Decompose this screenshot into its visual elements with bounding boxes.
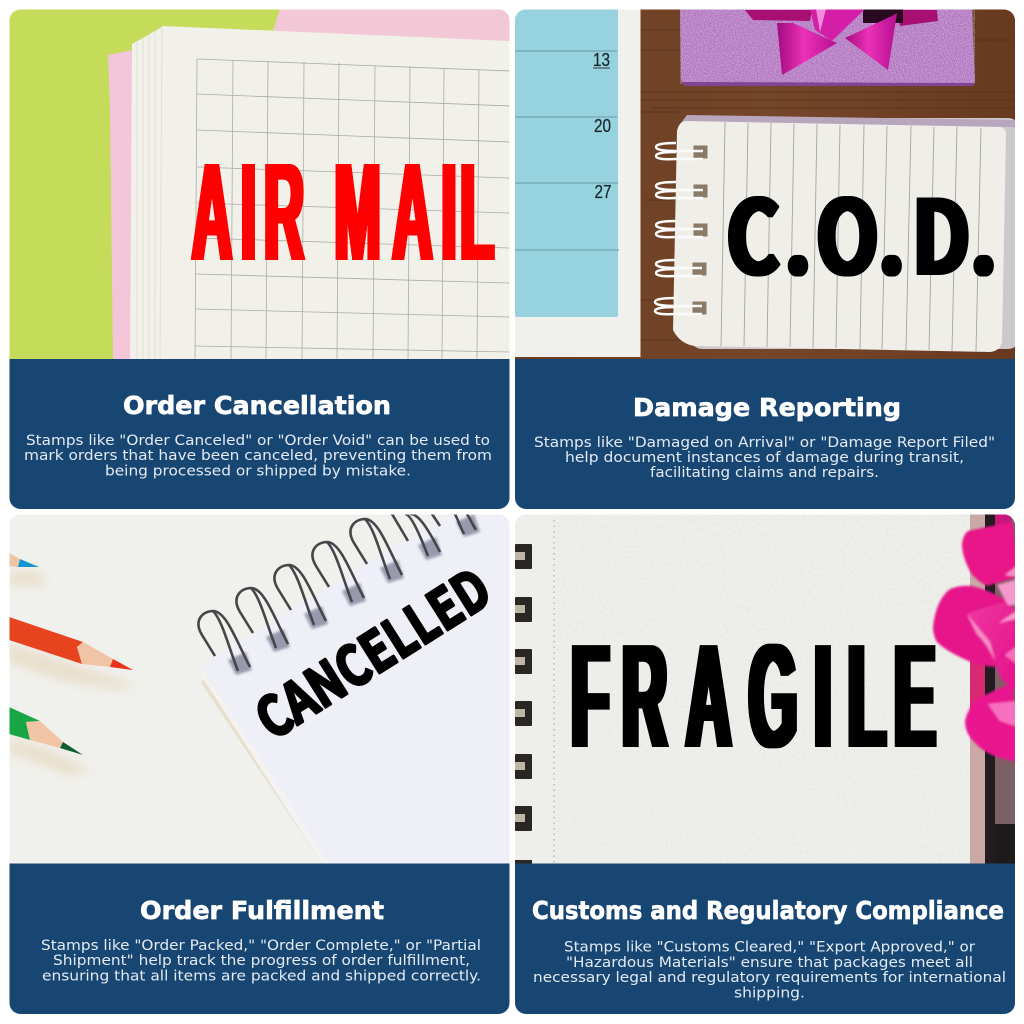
panel: order fulfillment bbox=[9, 514, 510, 1014]
body text: customs and regulatory compliance: "Hazardous Materials" ensure that packages meet all bbox=[566, 955, 973, 971]
photo: spiral notepad and coloured pencils bbox=[9, 514, 510, 865]
body text: damage reporting: facilitating claims and repairs. bbox=[650, 465, 879, 481]
stamp text: AIR MAIL: AIR MAIL bbox=[192, 134, 494, 290]
notepad bbox=[655, 115, 1020, 352]
caption band: order cancellation bbox=[9, 359, 510, 510]
pink flower bbox=[933, 522, 1018, 762]
body text: customs and regulatory compliance bbox=[533, 940, 1006, 1002]
spiral binding bbox=[515, 544, 532, 865]
body text: order fulfillment: Shipment" help track the progress of order fulfillment, bbox=[53, 953, 470, 969]
panel: damage reporting bbox=[515, 9, 1020, 510]
body text: order cancellation: mark orders that have been canceled, preventing them from bbox=[24, 448, 492, 464]
body text: order cancellation: Stamps like "Order Canceled" or "Order Void" can be used to bbox=[26, 433, 490, 449]
body text: order fulfillment: ensuring that all items are packed and shipped correctly. bbox=[42, 968, 481, 984]
caption band: order fulfillment bbox=[9, 864, 510, 1014]
stamp text: C.O.D.: C.O.D. bbox=[726, 156, 997, 304]
body text: order cancellation: being processed or shipped by mistake. bbox=[105, 464, 411, 480]
heading: order fulfillment: Order Fulfillment bbox=[140, 896, 384, 925]
notepad sheet bbox=[201, 514, 510, 864]
body text: order cancellation bbox=[24, 433, 492, 480]
spiral rings bbox=[655, 143, 708, 315]
body text: damage reporting bbox=[534, 435, 995, 481]
red pencil bbox=[9, 617, 133, 670]
calendar bbox=[515, 9, 640, 357]
body text: order fulfillment: Stamps like "Order Packed," "Order Complete," or "Partial bbox=[41, 938, 481, 954]
photo: textured notebook with pink flower bbox=[515, 514, 1018, 865]
body text: damage reporting: help document instances of damage during transit, bbox=[565, 450, 964, 466]
photo: calendar, gift box and spiral notepad on wood bbox=[515, 9, 1020, 360]
panel: order cancellation bbox=[9, 9, 510, 510]
green pencil bbox=[9, 707, 83, 755]
body text: damage reporting: Stamps like "Damaged on Arrival" or "Damage Report Filed" bbox=[534, 435, 995, 451]
blue pencil bbox=[9, 553, 39, 567]
heading: damage reporting: Damage Reporting bbox=[633, 393, 901, 422]
body text: customs and regulatory compliance: Stamps like "Customs Cleared," "Export Approved," or bbox=[564, 940, 975, 956]
gift box with bow bbox=[680, 9, 975, 86]
pencil shadows bbox=[9, 572, 135, 775]
calendar: 20 bbox=[594, 116, 611, 136]
spiral coils bbox=[198, 514, 476, 671]
caption band: customs and regulatory compliance bbox=[515, 864, 1016, 1014]
calendar: 13 bbox=[593, 50, 610, 70]
caption band: damage reporting bbox=[515, 359, 1016, 510]
photo: notebook on green and pink background bbox=[9, 9, 510, 360]
calendar: 27 bbox=[594, 182, 612, 202]
notebook edge strip bbox=[970, 514, 1016, 865]
stamp text: CANCELLED: CANCELLED bbox=[238, 546, 504, 755]
heading: order cancellation: Order Cancellation bbox=[123, 391, 391, 420]
panel: customs and regulatory compliance bbox=[515, 514, 1018, 1014]
body text: customs and regulatory compliance: necessary legal and regulatory requirements for international bbox=[533, 970, 1006, 986]
body text: order fulfillment bbox=[41, 938, 481, 984]
body text: customs and regulatory compliance: shipping. bbox=[734, 986, 805, 1002]
stamp text: FRAGILE: FRAGILE bbox=[571, 614, 936, 780]
coil holes bbox=[228, 514, 480, 675]
